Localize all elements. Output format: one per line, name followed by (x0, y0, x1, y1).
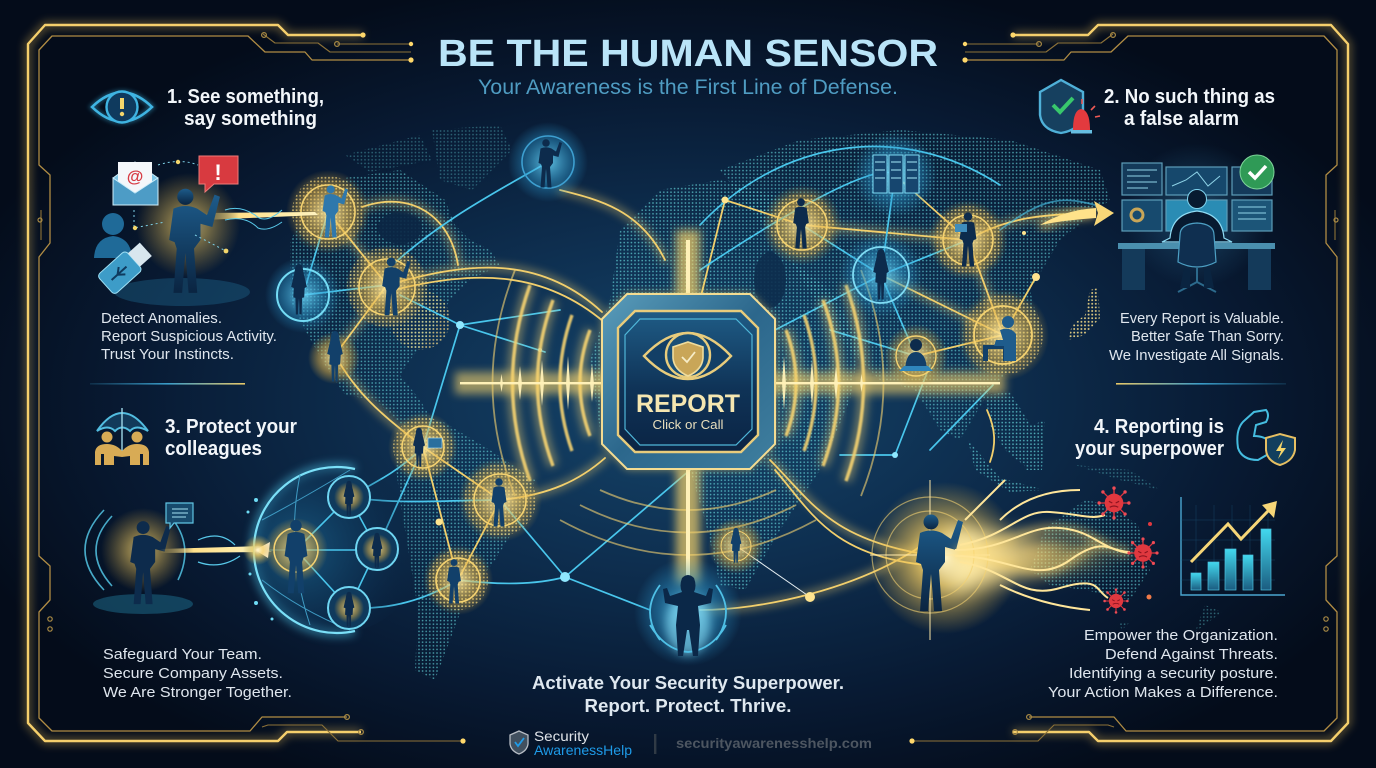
node: person presenting (458, 458, 542, 542)
icon: usb stick (97, 240, 155, 295)
central signal line and beams (455, 230, 1005, 584)
node: person top blue (508, 122, 588, 202)
node: person laptop (388, 412, 458, 482)
panel 3 text: Safeguard Your Team. (103, 646, 262, 663)
icon: virus threats (1097, 486, 1159, 614)
node: person at desk (957, 289, 1049, 381)
icon: gold eye with shield (644, 333, 731, 379)
world map of dots (290, 125, 1222, 680)
logo wordmark top: Security (534, 728, 589, 744)
icon: alert speech bubble (199, 156, 238, 192)
panel 2 text line 2: Better Safe Than Sorry. (1131, 328, 1284, 345)
chart: rising bars with arrow (1181, 497, 1285, 595)
globe of connected team (243, 467, 421, 633)
team member (328, 476, 370, 518)
panel 1 text line 2: Report Suspicious Activity. (101, 328, 277, 345)
panel 4 text: Empower the Organization. (1084, 627, 1278, 644)
call to action (532, 672, 844, 716)
icon: alert speech bubble: ! (214, 160, 222, 185)
node: person gold (286, 170, 370, 254)
node: person blue (839, 233, 923, 317)
report button (602, 294, 775, 469)
node: person with tablet (928, 200, 1008, 280)
icon: logo shield (510, 731, 528, 754)
node: person blue (265, 257, 341, 333)
icon: umbrella over two people (95, 408, 149, 465)
panel 4 text line 3: Identifying a security posture. (1069, 665, 1278, 682)
heading 4: 4. Reporting is (1094, 416, 1224, 438)
beam to globe (160, 498, 274, 620)
panel 2 text line 3: We Investigate All Signals. (1109, 347, 1284, 364)
title: BE THE HUMAN SENSOR (438, 33, 938, 75)
panel 2: no false alarm (1040, 80, 1284, 364)
energy waves toward threats (955, 480, 1130, 610)
panel 3 text line 2: Secure Company Assets. (103, 665, 283, 682)
person with phone and beam (114, 173, 318, 306)
panel 1: see something (92, 86, 324, 363)
panel 4: reporting is your superpower (869, 410, 1295, 701)
heading 3: 3. Protect your (165, 416, 297, 438)
team member (264, 518, 328, 593)
panel 3 text line 3: We Are Stronger Together. (103, 684, 292, 701)
node: person (423, 545, 493, 615)
button sublabel: Click or Call (652, 417, 724, 432)
dotted signal links (134, 162, 226, 251)
icon: user silhouette (94, 213, 132, 258)
node: server racks (853, 133, 937, 217)
subtitle: Your Awareness is the First Line of Defense. (478, 76, 898, 99)
icon: envelope (113, 162, 158, 205)
empowered person and energy burst (869, 480, 1130, 640)
node: person small (308, 331, 360, 384)
heading 2: 2. No such thing as (1104, 86, 1275, 108)
team member (328, 587, 370, 629)
node: person gold (762, 185, 842, 265)
website: securityawarenesshelp.com (676, 735, 872, 751)
icon: flexed arm and shield (1237, 410, 1295, 465)
panel 4 text line 2: Defend Against Threats. (1105, 646, 1278, 663)
heading 1 second line: say something (184, 108, 317, 130)
signal waves around report button (492, 270, 884, 555)
section divider lines (90, 383, 1286, 385)
network connections (303, 147, 1095, 610)
heading 1: 1. See something, (167, 86, 324, 108)
panel 2 text: Every Report is Valuable. (1120, 310, 1284, 327)
heading 3 second line: colleagues (165, 438, 262, 460)
bottom centre woman with halo (634, 558, 742, 666)
node: person (708, 518, 764, 574)
panel 3: protect colleagues (85, 408, 421, 701)
network nodes with people (265, 122, 1049, 615)
call to action line 2: Report. Protect. Thrive. (584, 695, 792, 716)
separator (654, 734, 656, 754)
footer logo and website (510, 728, 872, 758)
icon: shield and siren (1040, 80, 1100, 134)
icon: eye with exclamation (92, 92, 152, 122)
button label: REPORT (636, 390, 740, 418)
heading 2 second line: a false alarm (1124, 108, 1239, 130)
gold arrow to monitors (1040, 201, 1114, 227)
panel 1 text: Detect Anomalies. (101, 310, 222, 327)
node: person gold (345, 245, 429, 329)
node: person with laptop (884, 324, 948, 388)
icon: envelope: @ (127, 167, 143, 186)
logo wordmark bottom: AwarenessHelp (534, 742, 632, 758)
security operator at monitors (1118, 143, 1275, 292)
panel 1 text line 3: Trust Your Instincts. (101, 346, 234, 363)
team member (356, 528, 398, 570)
call to action line 1: Activate Your Security Superpower. (532, 672, 844, 693)
heading 4 second line: your superpower (1075, 438, 1224, 460)
panel 4 text line 4: Your Action Makes a Difference. (1048, 684, 1278, 701)
person speaking with rings (85, 503, 193, 614)
